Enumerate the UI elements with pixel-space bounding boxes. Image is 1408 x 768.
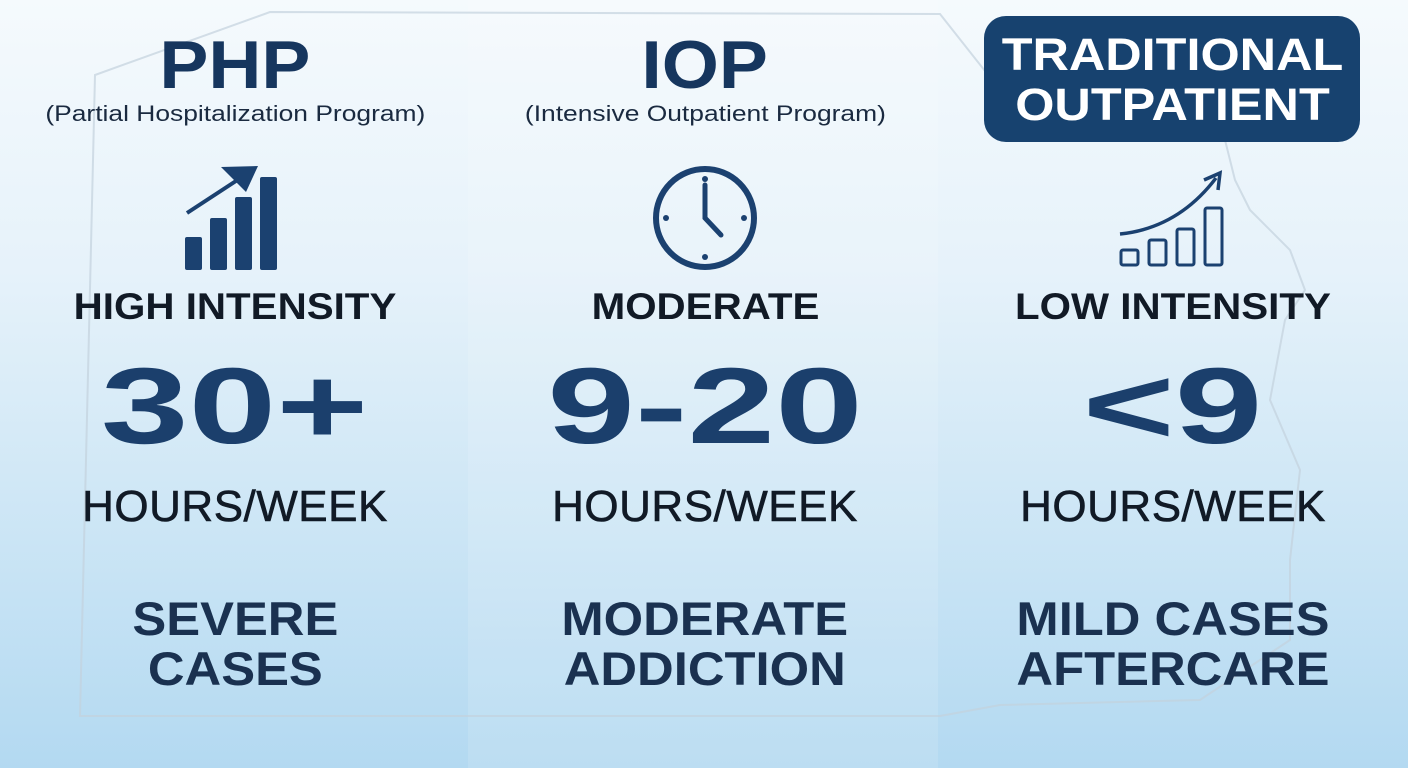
subtitle PHP: (Partial Hospitalization Program) — [45, 101, 425, 126]
number: 9-20: 9-20 — [547, 345, 863, 466]
panel: traditional outpatient — [984, 16, 1360, 695]
number: <9: <9 — [1083, 345, 1263, 466]
cases: severe: SEVERE — [132, 592, 338, 645]
heading badge: TRADITIONAL — [1001, 29, 1343, 80]
icon: clock — [653, 166, 757, 270]
label: moderate: MODERATE — [591, 286, 819, 327]
cases: severe: CASES — [148, 642, 322, 695]
heading badge — [984, 16, 1360, 142]
heading: PHP: PHP — [159, 27, 310, 103]
heading: IOP: IOP — [642, 27, 768, 103]
cases: mild aftercare: AFTERCARE — [1016, 642, 1329, 695]
icon: outline bar chart — [1120, 170, 1224, 266]
label: high intensity: HIGH INTENSITY — [74, 286, 396, 327]
hours per week: HOURS/WEEK — [1020, 482, 1326, 531]
label: low intensity: LOW INTENSITY — [1015, 286, 1331, 327]
column shading — [468, 0, 938, 768]
panel: PHP — [45, 27, 425, 695]
subtitle IOP: (Intensive Outpatient Program) — [525, 101, 885, 126]
cases: mild aftercare — [1016, 592, 1330, 695]
cases: severe — [132, 592, 338, 695]
cases: moderate addiction: MODERATE — [562, 592, 848, 645]
hours per week: HOURS/WEEK — [82, 482, 388, 531]
number: 30+: 30+ — [101, 345, 369, 466]
icon: bar chart arrow — [185, 166, 277, 270]
cases: moderate addiction — [562, 592, 848, 695]
heading badge: OUTPATIENT — [1015, 79, 1329, 130]
cases: moderate addiction: ADDICTION — [564, 642, 846, 695]
cases: mild aftercare: MILD CASES — [1016, 592, 1330, 645]
hours per week: HOURS/WEEK — [552, 482, 858, 531]
panel: IOP — [525, 27, 885, 695]
